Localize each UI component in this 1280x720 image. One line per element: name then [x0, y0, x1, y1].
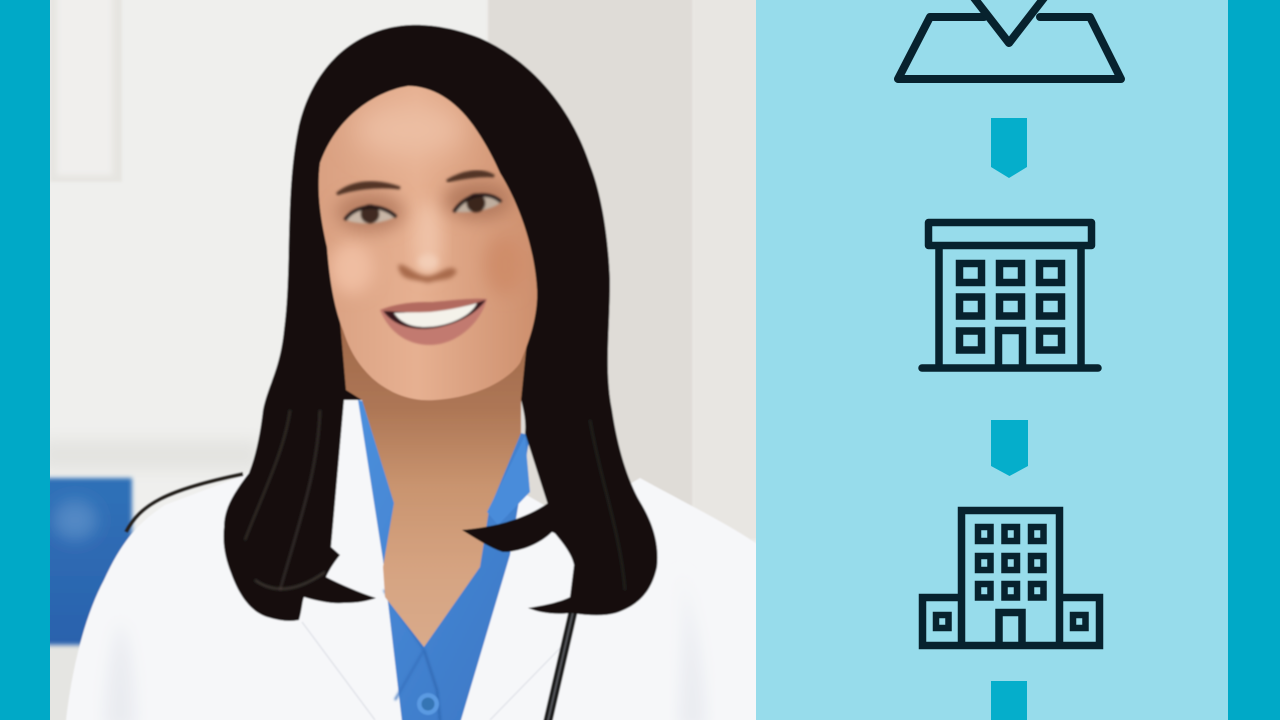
arrow 3: [991, 681, 1027, 720]
icon: map with location pin: [898, 0, 1121, 79]
right teal border: [1228, 0, 1280, 720]
blue collared shirt: [358, 400, 530, 720]
coat fold lines: [302, 622, 568, 720]
icon: large hospital building: [922, 510, 1100, 646]
neck and chest: [340, 290, 534, 647]
face: [319, 86, 537, 400]
shirt button: [417, 693, 439, 715]
right eye: [454, 194, 501, 212]
left eye: [345, 204, 396, 224]
stethoscope tube right: [547, 612, 573, 720]
photo background: clinic room: [40, 0, 766, 720]
right collar: [487, 436, 530, 525]
panel: photo of smiling doctor: [40, 0, 766, 720]
smile: [380, 299, 487, 345]
arrow 1: [991, 118, 1027, 178]
arrow 2: [991, 420, 1028, 476]
nose: [398, 254, 457, 283]
blurred blue monitor: [40, 478, 132, 645]
hair tuft over collar: [462, 503, 570, 552]
left eyebrow: [337, 183, 400, 194]
white lab coat: [65, 398, 766, 720]
stethoscope tube left: [126, 474, 243, 532]
panel: care pathway: [756, 0, 1228, 720]
long black hair: [223, 25, 658, 621]
left teal border: [0, 0, 50, 720]
icon: small clinic building: [922, 222, 1098, 368]
right eyebrow: [447, 172, 494, 181]
